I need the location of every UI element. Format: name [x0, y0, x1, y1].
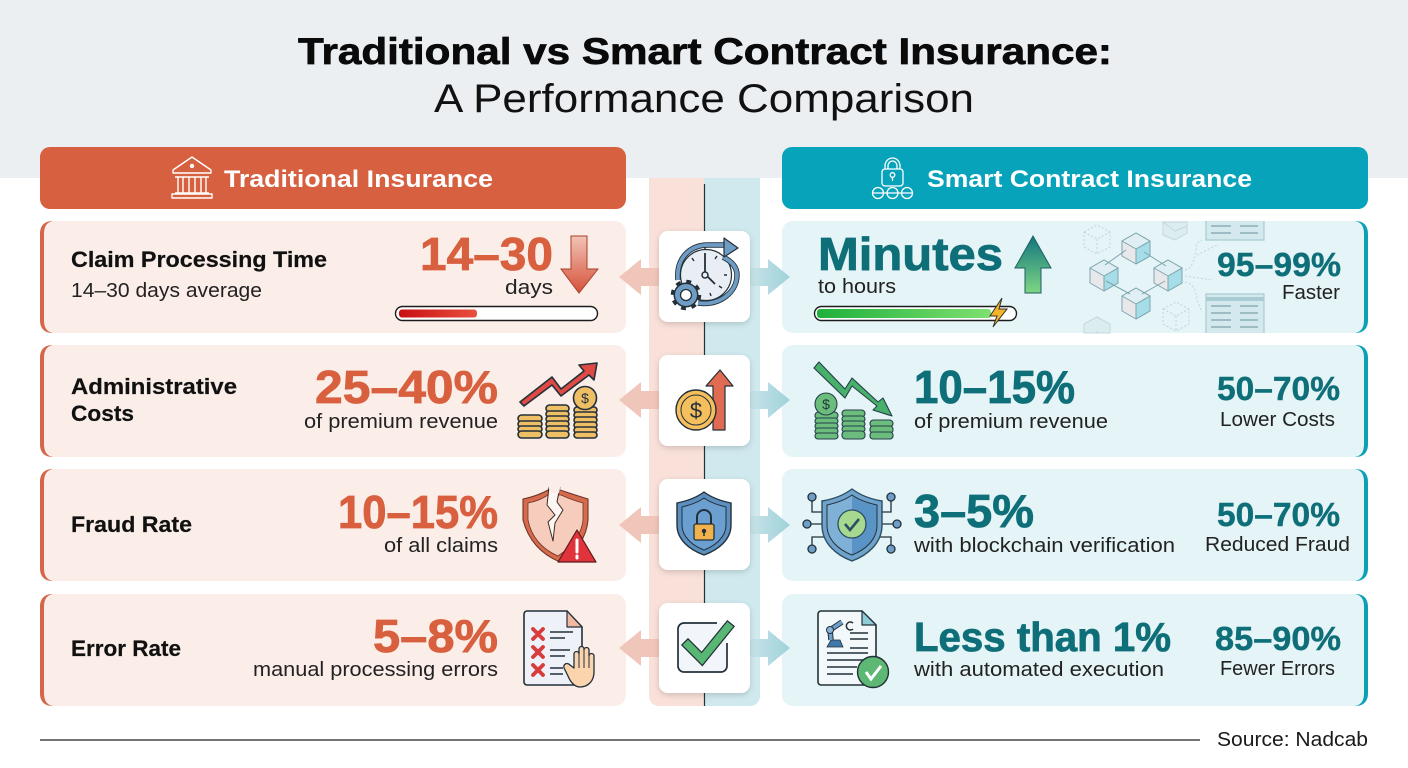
row 4 smart: error rate: with automated execution — [913, 659, 1164, 681]
icon: falling chart with green coins: $ — [822, 396, 830, 412]
title: Traditional vs Smart Contract Insurance: — [298, 31, 1112, 72]
progress bar: red — [396, 306, 598, 320]
icon: falling chart with green coins — [814, 362, 893, 439]
panel header: traditional insurance — [40, 147, 626, 209]
row 4 traditional: error rate: 5–8% — [373, 610, 498, 662]
progress bar: green with lightning — [814, 298, 1016, 327]
row 3 smart: fraud rate: with blockchain verification — [913, 535, 1175, 557]
panel header: smart contract insurance: Smart Contract Insurance — [927, 166, 1252, 193]
source note: Source: Nadcab — [1217, 729, 1368, 751]
row 1 traditional: claim processing time: days — [505, 277, 553, 299]
row 1 smart: claim processing time: to hours — [818, 276, 896, 298]
row 3 smart: fraud rate — [782, 469, 1368, 581]
icon: bank building — [172, 157, 212, 198]
arrows: row 1 — [619, 259, 790, 295]
background blockchain network — [1084, 221, 1264, 333]
row 3 traditional: fraud rate: of all claims — [384, 535, 498, 557]
central divider strip — [649, 178, 760, 706]
center tile: dollar coin with arrow icon: $ — [690, 398, 702, 423]
row 2 smart: administrative costs: 10–15% — [914, 361, 1075, 413]
row 4 smart: error rate — [782, 594, 1368, 706]
icon: rising chart with coins — [518, 363, 597, 438]
panel header: smart contract insurance — [782, 147, 1368, 209]
row 3 traditional: fraud rate — [40, 469, 626, 581]
row 4 traditional: error rate: manual processing errors — [253, 659, 498, 681]
icon: shield with circuit — [803, 489, 901, 561]
row 1 traditional: claim processing time — [40, 221, 626, 333]
row 2 traditional: administrative costs: of premium revenue — [304, 411, 498, 433]
row 2 traditional: administrative costs — [40, 345, 626, 457]
arrow: down red — [561, 236, 598, 293]
row 3 smart: fraud rate: 50–70% — [1217, 496, 1340, 533]
row 4 smart: error rate: Fewer Errors — [1220, 658, 1335, 680]
icon: document with robot arm and check — [818, 611, 888, 688]
row 1 smart: claim processing time: Faster — [1282, 282, 1340, 304]
row 1 traditional: claim processing time: 14–30 days average — [71, 280, 262, 302]
footer rule — [40, 739, 1200, 741]
row 2 traditional: administrative costs: Costs — [71, 401, 134, 426]
row 1 smart: claim processing time — [782, 221, 1368, 333]
center tile: shield with lock icon — [659, 479, 750, 570]
icon: rising chart with coins: $ — [581, 390, 589, 406]
row 2 smart: administrative costs: Lower Costs — [1220, 409, 1335, 431]
top background band — [0, 0, 1408, 178]
arrows: row 3 — [619, 507, 790, 543]
row 1 smart: claim processing time: 95–99% — [1217, 246, 1341, 283]
title: A Performance Comparison — [434, 77, 974, 121]
icon: broken shield with warning — [523, 486, 596, 562]
center tile: dollar coin with arrow icon — [659, 355, 750, 446]
center tile: check mark icon — [659, 603, 750, 693]
row 3 smart: fraud rate: Reduced Fraud — [1205, 534, 1350, 556]
row 3 smart: fraud rate: 3–5% — [914, 485, 1034, 537]
row 2 smart: administrative costs: of premium revenue — [914, 411, 1108, 433]
row 3 traditional: fraud rate: Fraud Rate — [71, 512, 192, 537]
center tile: clock icon — [659, 231, 750, 322]
row 1 traditional: claim processing time: 14–30 — [420, 228, 553, 280]
title — [298, 31, 1112, 121]
arrows: row 2 — [619, 382, 790, 418]
panel header: traditional insurance: Traditional Insurance — [224, 166, 493, 193]
row 2 smart: administrative costs: 50–70% — [1217, 370, 1340, 407]
row 2 smart: administrative costs — [782, 345, 1368, 457]
row 4 smart: error rate: 85–90% — [1215, 620, 1341, 657]
row 4 smart: error rate: Less than 1% — [914, 614, 1171, 660]
row 3 traditional: fraud rate: 10–15% — [338, 486, 498, 538]
icon: padlock and chain — [872, 158, 912, 198]
arrow: up green — [1015, 236, 1051, 293]
arrows: row 4 — [619, 630, 790, 666]
icon: checklist with errors and hand — [524, 611, 594, 687]
row 4 traditional: error rate: Error Rate — [71, 636, 181, 661]
row 1 smart: claim processing time: Minutes — [818, 228, 1003, 280]
row 2 traditional: administrative costs: 25–40% — [315, 361, 498, 413]
row 4 traditional: error rate — [40, 594, 626, 706]
row 1 traditional: claim processing time: Claim Processing Time — [71, 247, 327, 272]
row 2 traditional: administrative costs: Administrative — [71, 374, 237, 399]
